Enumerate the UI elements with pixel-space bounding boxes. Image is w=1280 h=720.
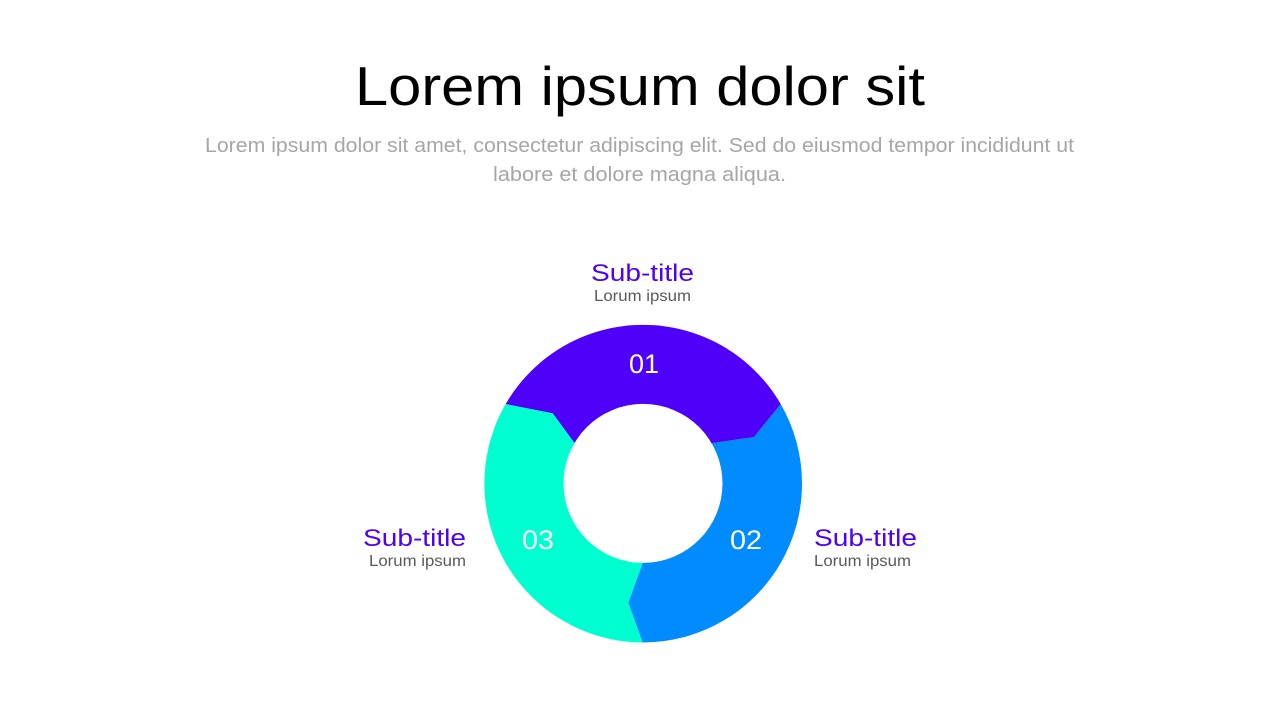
label: right: Sub-title bbox=[814, 525, 917, 552]
label: right: Lorum ipsum bbox=[814, 553, 911, 570]
segment 01 bbox=[506, 325, 781, 484]
donut chart bbox=[484, 325, 802, 643]
intro text block: labore et dolore magna aliqua. bbox=[493, 164, 786, 186]
label: left: Lorum ipsum bbox=[369, 553, 466, 570]
segment 03 bbox=[484, 404, 643, 642]
centre hole bbox=[564, 404, 722, 563]
number 02: 02 bbox=[730, 525, 762, 555]
title: Lorem ipsum dolor sit bbox=[355, 55, 925, 117]
number 01: 01 bbox=[629, 349, 659, 379]
number 03: 03 bbox=[522, 525, 554, 555]
segment 02 bbox=[628, 404, 802, 643]
intro text block bbox=[205, 135, 1074, 186]
intro text block: Lorem ipsum dolor sit amet, consectetur adipiscing elit. Sed do eiusmod tempor incididunt ut bbox=[205, 135, 1074, 157]
label: top: Lorum ipsum bbox=[594, 288, 691, 305]
label: right bbox=[814, 525, 917, 570]
label: left bbox=[363, 525, 466, 570]
label: left: Sub-title bbox=[363, 525, 466, 552]
label: top bbox=[591, 260, 694, 305]
label: top: Sub-title bbox=[591, 260, 694, 287]
